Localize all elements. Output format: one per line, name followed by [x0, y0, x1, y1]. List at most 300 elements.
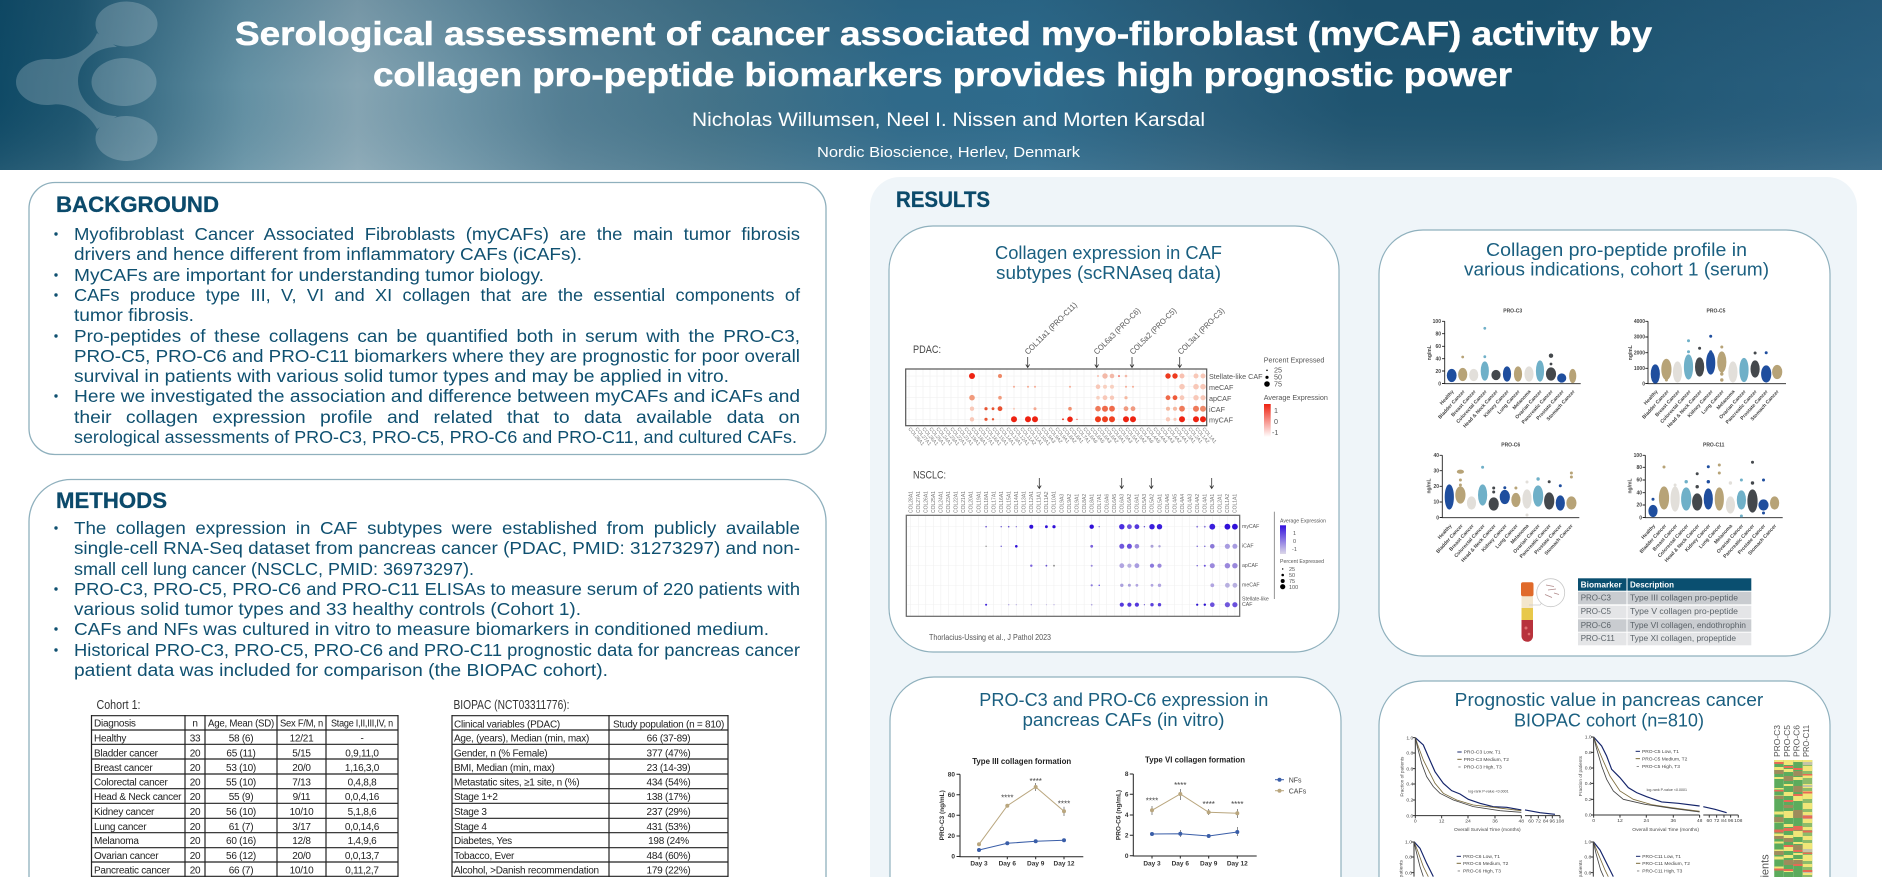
rotated gene labels: COL26A1 [920, 426, 939, 447]
line chart: type III collagen [939, 756, 1083, 868]
rotated gene labels: COL7A1 [1074, 426, 1092, 445]
chart: PRO-C3: 80 [1435, 332, 1441, 338]
table: cohort 1: Lung cancer [94, 822, 147, 833]
panel: collagen pro-peptide profile [1379, 230, 1830, 656]
top gene labels: COL12A1 [1029, 491, 1035, 513]
table: cohort 1: 20 [190, 836, 201, 847]
authors: Nicholas Willumsen, Neel I. Nissen and Morten Karsdal [692, 110, 1205, 131]
table: biopac: Alcohol, >Danish recommendation [454, 866, 599, 877]
top gene labels: COL18A1 [984, 491, 990, 513]
chart: PRO-C3: Pancreatic Cancer [1521, 389, 1555, 425]
table: biomarker descriptions: PRO-C5 [1581, 607, 1611, 616]
top gene labels: COL10A1 [1052, 491, 1058, 513]
table: cohort 1: 5/15 [292, 749, 311, 760]
methods bullet list: single-cell RNA-Seq dataset from pancreas cancer (PDAC, PMID: 31273297) and non- [74, 538, 800, 558]
table: cohort 1: Age, Mean (SD) [208, 719, 274, 730]
table: biopac: Diabetes, Yes [454, 836, 512, 847]
table: cohort 1: Healthy [94, 734, 126, 745]
legend: NSCLC: Percent Expressed [1280, 559, 1324, 565]
table: cohort 1: 0,11,2,7 [345, 866, 379, 877]
chart: PRO-C5: Stomach Cancer [1750, 389, 1781, 422]
chart: PRO-C6 [1426, 443, 1579, 564]
table: cohort 1: 33 [190, 734, 201, 745]
dot plot: PDAC [906, 369, 1263, 447]
legend: NSCLC: -1 [1292, 547, 1297, 553]
heatmap: patient biomarker levels: PRO-C11 [1801, 725, 1811, 757]
background bullet list: Myofibroblast Cancer Associated Fibroblasts (myCAFs) are the main tumor fibrosis [74, 224, 800, 244]
rotated gene labels: COL14A1 [997, 426, 1016, 447]
line chart: type III collagen: Day 9 [1027, 861, 1045, 868]
chart: PRO-C6: Healthy [1437, 523, 1454, 541]
survival curve: PRO-C3: PRO-C3 Medium, T2 [1464, 757, 1509, 763]
survival curve: PRO-C3: 0.4 [1406, 782, 1414, 788]
background bullet list: CAFs produce type III, V, VI and XI collagen that are the essential components of [74, 285, 800, 305]
survival curve: PRO-C6: 0.6 [1405, 870, 1412, 876]
methods bullet list: CAFs and NFs was cultured in vitro to measure biomarkers in conditioned medium. [74, 619, 769, 639]
chart: PRO-C11: Pancreatic Cancer [1722, 523, 1756, 560]
table: cohort 1: Kidney cancer [94, 807, 155, 818]
top gene labels: COL8A2 [1082, 494, 1088, 513]
citation: Thorlacius-Ussing et al., J Pathol 2023 [929, 633, 1051, 642]
chart: PRO-C6: 40 [1433, 453, 1439, 459]
rotated gene labels: COL17A1 [976, 426, 995, 447]
rotated gene labels: COL1A1 [1200, 426, 1218, 445]
survival curve: PRO-C11: patients [1578, 859, 1584, 877]
table: cohort 1: Sex F/M, n [280, 719, 323, 730]
chart: PRO-C11 [1628, 443, 1783, 564]
table: cohort 1: 0,4,8,8 [348, 778, 377, 789]
rotated gene labels: COL21A1 [955, 426, 974, 447]
table: cohort 1: 1,16,3,0 [345, 763, 380, 774]
rotated gene labels: COL16A1 [983, 426, 1002, 447]
chart: PRO-C11: Healthy [1640, 523, 1657, 541]
chart: PRO-C6: Prostate Cancer [1533, 523, 1564, 556]
legend: PDAC: Average Expression [1264, 393, 1328, 402]
survival curve: PRO-C3: 72 [1536, 819, 1541, 825]
top gene labels: COL5A3 [1142, 494, 1148, 513]
rotated gene labels: COL11A1 [1025, 426, 1044, 447]
table: cohort 1: Diagnosis [94, 719, 136, 730]
survival curve: PRO-C6: patients [1399, 859, 1405, 877]
rotated gene labels: COL4A6 [1137, 426, 1155, 445]
line chart: type III collagen: **** [1058, 800, 1070, 808]
panel: methods [29, 480, 826, 877]
survival curve: PRO-C5: log-rank P-value <0.0001 [1647, 788, 1687, 792]
top gene labels: COL6A5 [1112, 494, 1118, 513]
table: biomarker descriptions: Description [1630, 580, 1674, 590]
heatmap: patient biomarker levels: PRO-C5 [1782, 725, 1792, 757]
top gene labels: COL6A3 [1120, 494, 1126, 513]
panel: results [870, 177, 1857, 877]
table: cohort 1: 12/21 [290, 734, 314, 745]
line chart: type VI collagen: 8 [1125, 771, 1129, 778]
table: cohort 1: 20 [190, 807, 201, 818]
survival curve: PRO-C3: 1.0 [1406, 735, 1414, 741]
survival curve: PRO-C5: Overall Survival Time (months) [1632, 827, 1699, 833]
line chart: type III collagen: 80 [948, 772, 955, 778]
background bullet list: MyCAFs are important for understanding tumor biology. [74, 265, 544, 285]
table: cohort 1: 55 (9) [229, 792, 253, 803]
rotated gene labels: COL22A1 [948, 426, 967, 447]
line chart: type III collagen: **** [1001, 794, 1014, 802]
top gene labels: COL4A2 [1195, 494, 1201, 513]
survival curve: PRO-C5: Fraction of patients [1578, 756, 1584, 796]
survival curve: PRO-C5: 0.6 [1585, 766, 1592, 772]
label: cohort 1: Cohort 1: [96, 698, 140, 712]
rotated gene labels: COL4A1 [1172, 426, 1190, 445]
table: cohort 1: 1,4,9,6 [348, 836, 377, 847]
survival curve: PRO-C5 [1578, 735, 1743, 833]
table: cohort 1: 66 (7) [229, 866, 253, 877]
table: cohort 1: 12/8 [292, 836, 311, 847]
rotated gene labels: COL8A1 [1067, 426, 1085, 445]
chart: PRO-C3: 0 [1438, 381, 1441, 387]
background bullet list: serological assessments of PRO-C3, PRO-C5, PRO-C6 and PRO-C11, and cultured CAFs. [74, 427, 797, 447]
rotated gene labels: COL10A1 [1032, 426, 1051, 447]
top gene labels: COL2A1 [1218, 494, 1224, 513]
chart: PRO-C6: 0 [1436, 515, 1439, 521]
table: biopac: 66 (37-89) [647, 734, 690, 745]
panel heading [1464, 240, 1769, 279]
top gene labels: COL24A1 [939, 491, 945, 513]
rotated gene labels: COL8A2 [1060, 426, 1078, 445]
chart: PRO-C11: 60 [1636, 478, 1642, 484]
panel: collagen expression in CAF subtypes [889, 226, 1830, 877]
survival curve: PRO-C3: 24 [1465, 819, 1471, 825]
chart: PRO-C5: 0 [1642, 381, 1645, 387]
top gene labels: COL6A2 [1127, 494, 1133, 513]
top gene labels: COL23A1 [946, 491, 952, 513]
survival curve: PRO-C5: 0.8 [1585, 750, 1592, 756]
table: biomarker descriptions: Type XI collagen, propeptide [1630, 634, 1737, 643]
table: biomarker descriptions: Type V collagen pro-peptide [1630, 607, 1739, 616]
survival curve: PRO-C5: 0.2 [1585, 797, 1592, 803]
chart: PRO-C5: Lung Cancer [1701, 389, 1726, 416]
methods bullet list: Historical PRO-C3, PRO-C5, PRO-C6 and PRO-C11 prognostic data for pancreas cancer [74, 640, 800, 660]
chart: PRO-C3: Bladder Cancer [1437, 389, 1467, 421]
legend: NSCLC: 25 [1289, 567, 1295, 573]
survival curve: PRO-C5: 84 [1721, 818, 1727, 824]
table: cohort 1: Bladder cancer [94, 749, 159, 760]
label: PDAC: PDAC: [913, 344, 941, 356]
legend: NSCLC: 100 [1289, 585, 1298, 591]
row labels: NSCLC: myCAF [1242, 524, 1259, 530]
rotated gene labels: COL9A1 [1053, 426, 1071, 445]
line chart: type III collagen: Day 12 [1054, 861, 1075, 868]
table: biomarker descriptions: Type III collagen pro-peptide [1630, 594, 1739, 602]
table: cohort 1: 9/11 [293, 792, 311, 803]
table: cohort 1: 55 (10) [226, 778, 256, 789]
top gene labels: COL5A2 [1150, 494, 1156, 513]
legend: NSCLC [1274, 512, 1326, 599]
table: cohort 1: Melanoma [94, 836, 139, 847]
survival curve: PRO-C11: PRO-C11 High, T3 [1642, 869, 1683, 875]
chart: PRO-C5: 4000 [1634, 319, 1645, 325]
table: cohort 1: 53 (10) [226, 763, 256, 774]
rotated gene labels: COL18A1 [969, 426, 988, 447]
rotated gene labels: COL9A2 [1046, 426, 1064, 445]
chart: PRO-C11: 80 [1636, 465, 1642, 471]
legend: PDAC: 75 [1274, 380, 1282, 388]
chart: PRO-C3: 40 [1435, 356, 1441, 362]
table: cohort 1 [92, 715, 398, 877]
table: cohort 1: Pancreatic cancer [94, 866, 171, 877]
chart: PRO-C11: 0 [1639, 515, 1642, 521]
panel heading: PRO-C3 and PRO-C6 expression in [979, 690, 1268, 710]
heading: methods: METHODS [56, 488, 167, 513]
legend: PDAC: Percent Expressed [1264, 356, 1324, 365]
table: cohort 1: 20 [190, 851, 201, 862]
survival curve: PRO-C3: 60 [1528, 819, 1534, 825]
panel: background [29, 182, 826, 454]
table: cohort 1: n [192, 719, 198, 730]
survival curve: PRO-C3: 12 [1439, 819, 1445, 825]
table: cohort 1: 20 [190, 749, 201, 760]
survival curve: PRO-C5: 60 [1707, 818, 1712, 824]
chart: PRO-C3: Breast Cancer [1450, 389, 1478, 418]
table: biopac [452, 715, 728, 877]
survival curve: PRO-C3: 0.6 [1406, 766, 1414, 772]
line chart: type III collagen: **** [1029, 777, 1042, 786]
panel heading [995, 243, 1222, 283]
line chart: type VI collagen: Day 6 [1172, 861, 1189, 868]
row labels: NSCLC: CAF [1242, 602, 1252, 608]
rotated gene labels [906, 426, 1218, 447]
legend: NFs and CAFs: CAFs [1289, 788, 1307, 796]
survival curve: PRO-C5: 1.0 [1585, 735, 1592, 741]
survival curve: PRO-C3: log-rank P-value <0.0001 [1468, 789, 1509, 793]
legend: PDAC: 0 [1274, 417, 1278, 426]
table: biopac: Gender, n (% Female) [454, 749, 547, 760]
chart: PRO-C11: Stomach Cancer [1747, 523, 1778, 557]
chart: PRO-C6: 10 [1433, 500, 1439, 506]
line chart: type VI collagen: 4 [1125, 812, 1129, 819]
chart: PRO-C6: Ovarian Cancer [1512, 523, 1542, 555]
table: cohort 1: 0,0,14,6 [345, 822, 380, 833]
table: biopac: Stage 4 [454, 822, 487, 833]
line chart: type VI collagen: Type VI collagen formation [1145, 755, 1245, 765]
survival curve: PRO-C3: 36 [1492, 819, 1498, 825]
table: cohort 1: 60 (16) [226, 836, 256, 847]
table: cohort 1: - [360, 734, 364, 745]
table: cohort 1: Stage I,II,III,IV, n [331, 719, 393, 730]
row labels: apCAF [1209, 394, 1232, 403]
panel heading [1455, 690, 1763, 731]
chart: PRO-C3: PRO-C3 [1503, 309, 1522, 315]
chart: PRO-C5: Colorectal Cancer [1659, 389, 1693, 425]
methods bullet list: small cell lung cancer (NSCLC, PMID: 36973297). [74, 559, 474, 579]
table: cohort 1: 0,0,13,7 [345, 851, 380, 862]
survival curve: PRO-C3: PRO-C3 Low, T1 [1464, 750, 1501, 756]
table: cohort 1: 20 [190, 822, 201, 833]
top gene labels: COL19A1 [976, 491, 982, 513]
survival curve: PRO-C5: PRO-C5 High, T3 [1642, 764, 1680, 770]
table: cohort 1: 7/13 [292, 778, 311, 789]
line chart: type III collagen: 20 [948, 833, 955, 840]
title: Serological assessment of cancer associated myo-fibroblast (myCAF) activity by [235, 15, 1653, 52]
chart: PRO-C3 [1427, 309, 1581, 429]
top gene labels: COL11A1 [1037, 491, 1043, 513]
chart: PRO-C5: Melanoma [1716, 389, 1737, 411]
dot plot: NSCLC [906, 491, 1326, 642]
survival curve: PRO-C5: 0.4 [1585, 781, 1592, 787]
heatmap: patient biomarker levels [1760, 725, 1811, 877]
top gene labels: COL21A1 [961, 491, 967, 513]
rotated gene labels: COL28A1 [906, 426, 925, 447]
chart: PRO-C6: Kidney Cancer [1481, 523, 1509, 553]
arrows: PDAC gene callouts [1026, 357, 1182, 368]
table: cohort 1: 20 [190, 778, 201, 789]
chart: PRO-C6: 30 [1433, 468, 1439, 474]
row labels: NSCLC: Stellate-like [1242, 596, 1269, 602]
table: cohort 1: 10/10 [290, 866, 314, 877]
header banner [0, 0, 1882, 170]
table: cohort 1: 20 [190, 792, 201, 803]
chart: PRO-C3: 100 [1433, 319, 1441, 325]
chart: PRO-C5: Kidney Cancer [1687, 389, 1715, 419]
line chart: type VI collagen: **** [1202, 800, 1215, 809]
line chart: type III collagen: 40 [948, 812, 955, 820]
background bullet list: survival in patients with various solid tumor types and may be applied in vitro. [74, 366, 729, 386]
line chart: type VI collagen: 0 [1125, 853, 1129, 860]
chart: PRO-C5: ng/mL [1628, 345, 1634, 360]
background bullet list: PRO-C5, PRO-C6 and PRO-C11 biomarkers where they are prognostic for poor overall [74, 346, 800, 366]
chart: PRO-C11: Prostate Cancer [1737, 523, 1767, 556]
chart: PRO-C11: Breast Cancer [1652, 523, 1679, 553]
table: biomarker descriptions: PRO-C3 [1581, 594, 1611, 602]
line chart: type VI collagen: **** [1146, 796, 1158, 806]
chart: PRO-C3: Kidney Cancer [1483, 389, 1511, 419]
chart: PRO-C3: Prostate Cancer [1535, 389, 1566, 422]
rotated gene labels: COL11A2 [1018, 426, 1037, 447]
chart: PRO-C11: 100 [1634, 453, 1642, 459]
chart: PRO-C6: Breast Cancer [1448, 523, 1476, 553]
survival curve: PRO-C3: 84 [1543, 819, 1549, 825]
table: biopac: Age, (years), Median (min, max) [454, 734, 589, 745]
line chart: type VI collagen: Day 12 [1227, 861, 1248, 868]
line chart: type III collagen: 0 [951, 854, 955, 861]
rotated gene labels: COL6A6 [1081, 426, 1099, 445]
chart: PRO-C5: 3000 [1634, 335, 1645, 341]
line chart: type III collagen: 60 [948, 792, 955, 799]
table: cohort 1: 5,1,8,6 [348, 807, 377, 818]
chart: PRO-C6: Melanoma [1510, 523, 1531, 546]
chart: PRO-C6: 20 [1433, 484, 1439, 490]
chart: PRO-C3: Stomach Cancer [1546, 389, 1577, 422]
top gene labels: COL7A1 [1097, 494, 1103, 513]
survival curve: PRO-C3: PRO-C3 High, T3 [1464, 765, 1502, 771]
heading: background: BACKGROUND [56, 192, 219, 217]
heatmap: patient biomarker levels: ients [1760, 854, 1772, 877]
survival curve: PRO-C5: 12 [1617, 818, 1623, 824]
survival curve: PRO-C5: 96 [1728, 818, 1734, 824]
survival curve: PRO-C5: 36 [1671, 818, 1676, 824]
table: biopac: 138 (17%) [647, 792, 690, 803]
affiliation: Nordic Bioscience, Herlev, Denmark [817, 144, 1081, 161]
label: NSCLC: NSCLC: [913, 470, 946, 482]
top gene labels: COL13A1 [1022, 491, 1028, 513]
table: cohort 1: Breast cancer [94, 763, 153, 774]
table: biopac: 179 (22%) [647, 866, 690, 877]
legend: NSCLC: 50 [1289, 573, 1295, 579]
panel: prognostic value in pancreas cancer [1379, 681, 1830, 877]
rotated gene labels: COL4A4 [1151, 426, 1169, 445]
survival curve: PRO-C3: 48 [1519, 819, 1524, 825]
table: biopac: 198 (24% [648, 836, 689, 847]
chart: PRO-C11: Lung Cancer [1698, 523, 1723, 550]
table: biopac: Metastatic sites, ≥1 site, n (%) [454, 778, 579, 789]
heatmap: patient biomarker levels: PRO-C6 [1792, 725, 1802, 757]
line chart: type VI collagen: PRO-C6 (ng/mL) [1116, 790, 1122, 840]
table: cohort 1: Colorectal cancer [94, 778, 168, 789]
chart: PRO-C11: 40 [1636, 490, 1642, 496]
table: cohort 1: 20 [190, 763, 201, 774]
rotated gene labels: COL4A2 [1165, 426, 1183, 445]
rotated gene labels: COL4A5 [1144, 426, 1162, 445]
top gene labels: COL25A1 [931, 491, 937, 513]
chart: PRO-C5: PRO-C5 [1707, 309, 1726, 315]
survival curve: PRO-C3: 96 [1550, 819, 1555, 825]
methods bullet list [54, 518, 800, 680]
rotated gene labels: COL6A1 [1109, 426, 1127, 445]
table: cohort 1: 56 (12) [226, 851, 256, 862]
chart: PRO-C6: Colorectal Cancer [1453, 523, 1487, 559]
chart: PRO-C11: Head & Neck Cancer [1664, 523, 1701, 564]
arrows: NSCLC genes [1037, 478, 1214, 488]
top gene labels: COL1A2 [1225, 494, 1231, 513]
table: cohort 1: 61 (7) [229, 822, 253, 833]
rotated gene labels: COL3A1 [1179, 426, 1197, 445]
chart: PRO-C3: 20 [1435, 369, 1441, 375]
table: biopac: 484 (60%) [647, 851, 690, 862]
table: biomarker descriptions: Type VI collagen, endothrophin [1630, 621, 1746, 630]
survival curve: PRO-C3: 0.2 [1406, 798, 1414, 804]
legend: PDAC: 50 [1274, 372, 1282, 382]
legend: PDAC [1264, 356, 1328, 437]
chart: PRO-C5: Healthy [1643, 389, 1660, 406]
top gene labels: COL4A4 [1180, 494, 1186, 513]
top gene labels: COL8A1 [1089, 494, 1095, 513]
table: biopac: BMI, Median (min, max) [454, 763, 555, 774]
methods bullet list: The collagen expression in CAF subtypes were established from publicly available [74, 518, 800, 538]
chart: PRO-C5: Pancreatic Cancer [1725, 389, 1759, 425]
row labels: NSCLC: meCAF [1242, 582, 1260, 588]
survival curve: PRO-C6: PRO-C6 High, T3 [1463, 869, 1501, 875]
chart: PRO-C3: Lung Cancer [1497, 389, 1522, 416]
line chart: type VI collagen: Day 9 [1200, 861, 1218, 868]
background bullet list: tumor fibrosis. [74, 305, 194, 325]
chart: PRO-C6: Head & Neck Cancer [1460, 523, 1498, 564]
chart: PRO-C5: Head & Neck Cancer [1666, 389, 1704, 429]
chart: PRO-C11: Kidney Cancer [1684, 523, 1712, 553]
chart: PRO-C11: Melanoma [1713, 523, 1734, 546]
background bullet list: their collagen expression profile and related that to data available data on [74, 407, 800, 427]
icon: blood collection tube [1521, 579, 1565, 642]
legend: PDAC: 25 [1274, 366, 1282, 374]
survival curve: PRO-C3: 0.8 [1406, 751, 1414, 757]
rotated gene labels: COL6A5 [1088, 426, 1106, 445]
top gene labels: COL4A6 [1165, 494, 1171, 513]
top gene labels: COL14A1 [1014, 491, 1020, 513]
chart: PRO-C11: Colorectal Cancer [1657, 523, 1690, 559]
chart: PRO-C3: Colorectal Cancer [1455, 389, 1489, 425]
top gene labels: COL1A1 [1233, 494, 1239, 513]
top gene labels: COL20A1 [969, 491, 975, 513]
rotated gene labels: COL19A1 [962, 426, 981, 447]
table: cohort 1: 3/17 [292, 822, 311, 833]
top gene labels: COL9A1 [1074, 494, 1080, 513]
rotated gene labels: COL9A3 [1039, 426, 1057, 445]
